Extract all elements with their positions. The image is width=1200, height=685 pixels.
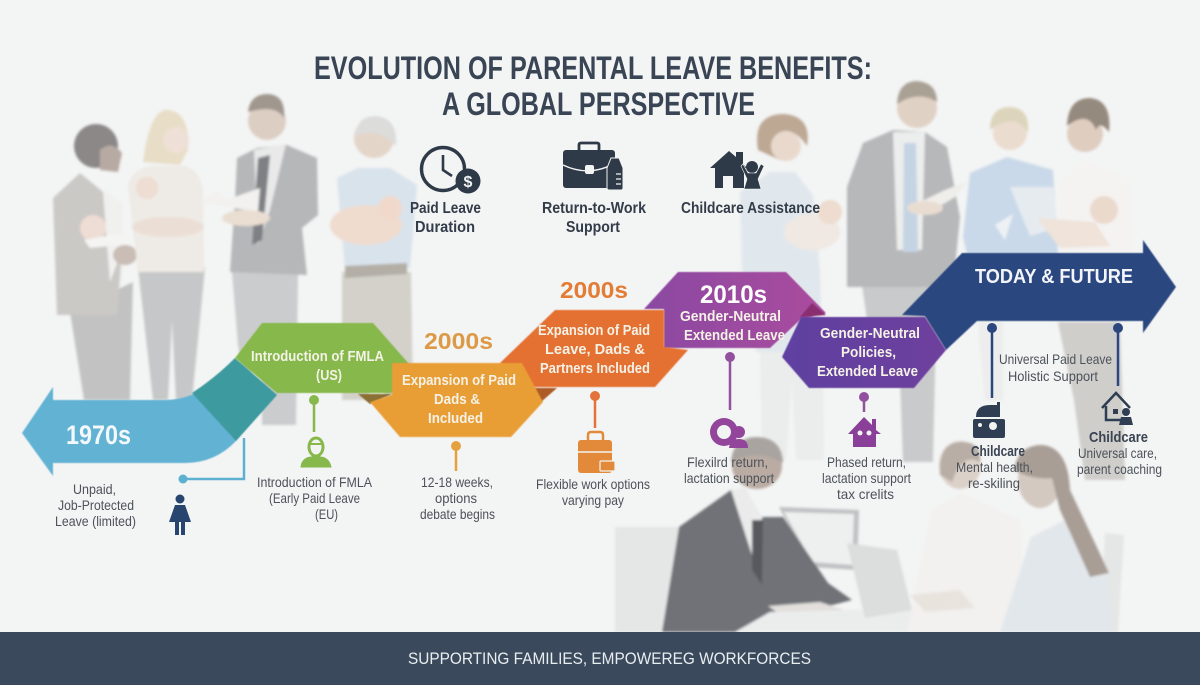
label: 2010s stage [680,281,785,344]
text: red-orange stage details: Flexible work options [536,476,650,492]
connector: violet stage [859,392,869,412]
text: FMLA details: (Early Paid Leave [269,490,360,506]
monitor [779,507,859,570]
table [735,606,1000,632]
footer banner [0,632,1200,685]
label: violet stage: Policies, [841,344,896,361]
label: red-orange stage: Leave, Dads & [545,341,645,358]
pillar: return-to-work support: Return-to-Work [542,200,646,217]
label: 1970s: 1970s [66,420,131,450]
text: FMLA details: Introduction of FMLA [257,474,373,490]
man in suit with paper [847,81,968,462]
chairs [615,527,1124,632]
icon: outline house with child [1102,393,1133,425]
pillar: return-to-work support: Support [566,219,621,236]
text: universal paid leave [999,351,1112,384]
icon: clock with dollar: $ [464,174,473,191]
text: 1970s details: Job-Protected [58,497,134,513]
connector: future right [1113,323,1123,386]
label: FMLA stage: (US) [316,367,342,384]
woman in blue shirt [963,107,1058,400]
pillar: childcare assistance: Childcare Assistance [681,200,820,217]
label: violet stage: Extended Leave [817,363,918,380]
text: 1970s details: Unpaid, [73,481,116,497]
shadow fold [358,394,392,404]
connector: FMLA [309,395,319,432]
photo: office team at a desk [615,437,1124,632]
title: EVOLUTION OF PARENTAL LEAVE BENEFITS: [314,50,872,86]
footer banner: SUPPORTING FAMILIES, EMPOWEREG WORKFORCES [408,649,811,668]
woman in white jacket [907,441,1024,632]
icon: house with child [710,151,764,189]
text: childcare universal care: parent coaching [1077,461,1162,477]
text: orange stage details: debate begins [420,506,495,522]
connector: future left [987,323,997,398]
woman in grey blazer [53,124,137,400]
text: FMLA details [257,474,373,522]
photo: left group of people [53,94,417,425]
heading: first 2000s: 2000s [424,328,493,354]
timeline stage: red-orange hexagon [500,310,688,402]
pillar: childcare assistance [681,151,820,217]
text: 1970s details [55,481,136,529]
text: red-orange stage details: varying pay [562,492,624,508]
timeline stage: magenta hexagon [644,272,826,348]
label: red-orange stage [538,322,650,377]
photo: right group of people [740,81,1133,480]
label: red-orange stage: Expansion of Paid [538,322,650,339]
text: 2010s details: lactation support [684,470,774,486]
title: A GLOBAL PERSPECTIVE [442,86,755,122]
pillar: paid leave duration: Paid Leave [410,200,481,217]
label: 2010s stage: Extended Leave [684,327,785,344]
timeline stage: 1970s arrow [22,358,277,476]
text: red-orange stage details [536,476,650,508]
icon: childcare building [973,402,1005,438]
text: orange stage details: 12-18 weeks, [421,474,493,490]
label: violet stage [817,325,920,380]
shadow fold [522,388,557,402]
label: orange stage: Expansion of Paid [402,372,516,389]
label: red-orange stage: Partners Included [540,360,650,377]
icon: orange suitcase [578,432,615,473]
icon: purple house [848,417,881,447]
text: childcare universal care: Universal care, [1078,445,1157,461]
text: violet stage details: Phased return, [827,454,906,470]
text: universal paid leave: Holistic Support [1008,368,1098,384]
timeline stage: orange hexagon [370,363,543,437]
label: 2010s stage: 2010s [700,281,767,309]
man in grey suit [200,94,318,425]
text: childcare universal care [1077,429,1162,477]
connector: 1970s [178,438,244,484]
older man in blue shirt [330,116,417,400]
connector: 2010s stage [725,352,735,410]
text: childcare mental health: Childcare [971,443,1025,460]
text: 2010s details [684,454,774,486]
man in dark suit [662,437,852,632]
man in white shirt with baby [1037,98,1133,480]
heading: second 2000s: 2000s [560,277,628,303]
icon: woman figure [169,494,191,535]
text: childcare universal care: Childcare [1089,429,1148,446]
label: orange stage: Included [428,410,483,427]
label: orange stage [402,372,516,427]
woman with baby [740,114,842,460]
title [314,50,872,122]
label: orange stage: Dads & [434,391,480,408]
text: universal paid leave: Universal Paid Leave [999,351,1112,367]
icon: briefcase and bottle [563,143,623,190]
text: violet stage details: lactation support [822,470,911,486]
text: childcare mental health: Mental health, [956,459,1033,475]
label: violet stage: Gender-Neutral [820,325,920,342]
timeline stage: today and future arrow [902,240,1176,350]
text: orange stage details: options [435,490,477,506]
woman with ponytail [1000,445,1112,632]
pillar: paid leave duration [410,148,481,236]
text: childcare mental health: re-skiling [968,475,1020,491]
blonde woman [128,110,205,400]
label: 2010s stage: Gender-Neutral [680,308,781,325]
teal fold [192,358,277,441]
text: violet stage details [822,454,911,502]
connector: red-orange stage [590,391,600,428]
shadow fold [800,303,826,317]
label: FMLA stage: Introduction of FMLA [251,348,384,365]
text: orange stage details [420,474,495,522]
icon: circle and person [710,418,748,448]
label: FMLA stage [251,348,384,384]
label: today and future: TODAY & FUTURE [975,266,1133,288]
text: violet stage details: tax crelits [837,486,894,502]
text: 2010s details: Flexilrd return, [687,454,768,470]
text: 1970s details: Leave (limited) [55,513,136,529]
pillar: paid leave duration: Duration [415,219,475,236]
laptop [847,543,912,618]
timeline stage: violet hexagon [782,317,946,388]
connector: orange stage [451,441,461,471]
text: FMLA details: (EU) [315,506,338,522]
timeline stage: green FMLA hexagon [235,323,410,404]
pillar: return-to-work support [542,143,646,236]
icon: person in green [301,438,331,467]
text: childcare mental health [956,443,1033,491]
